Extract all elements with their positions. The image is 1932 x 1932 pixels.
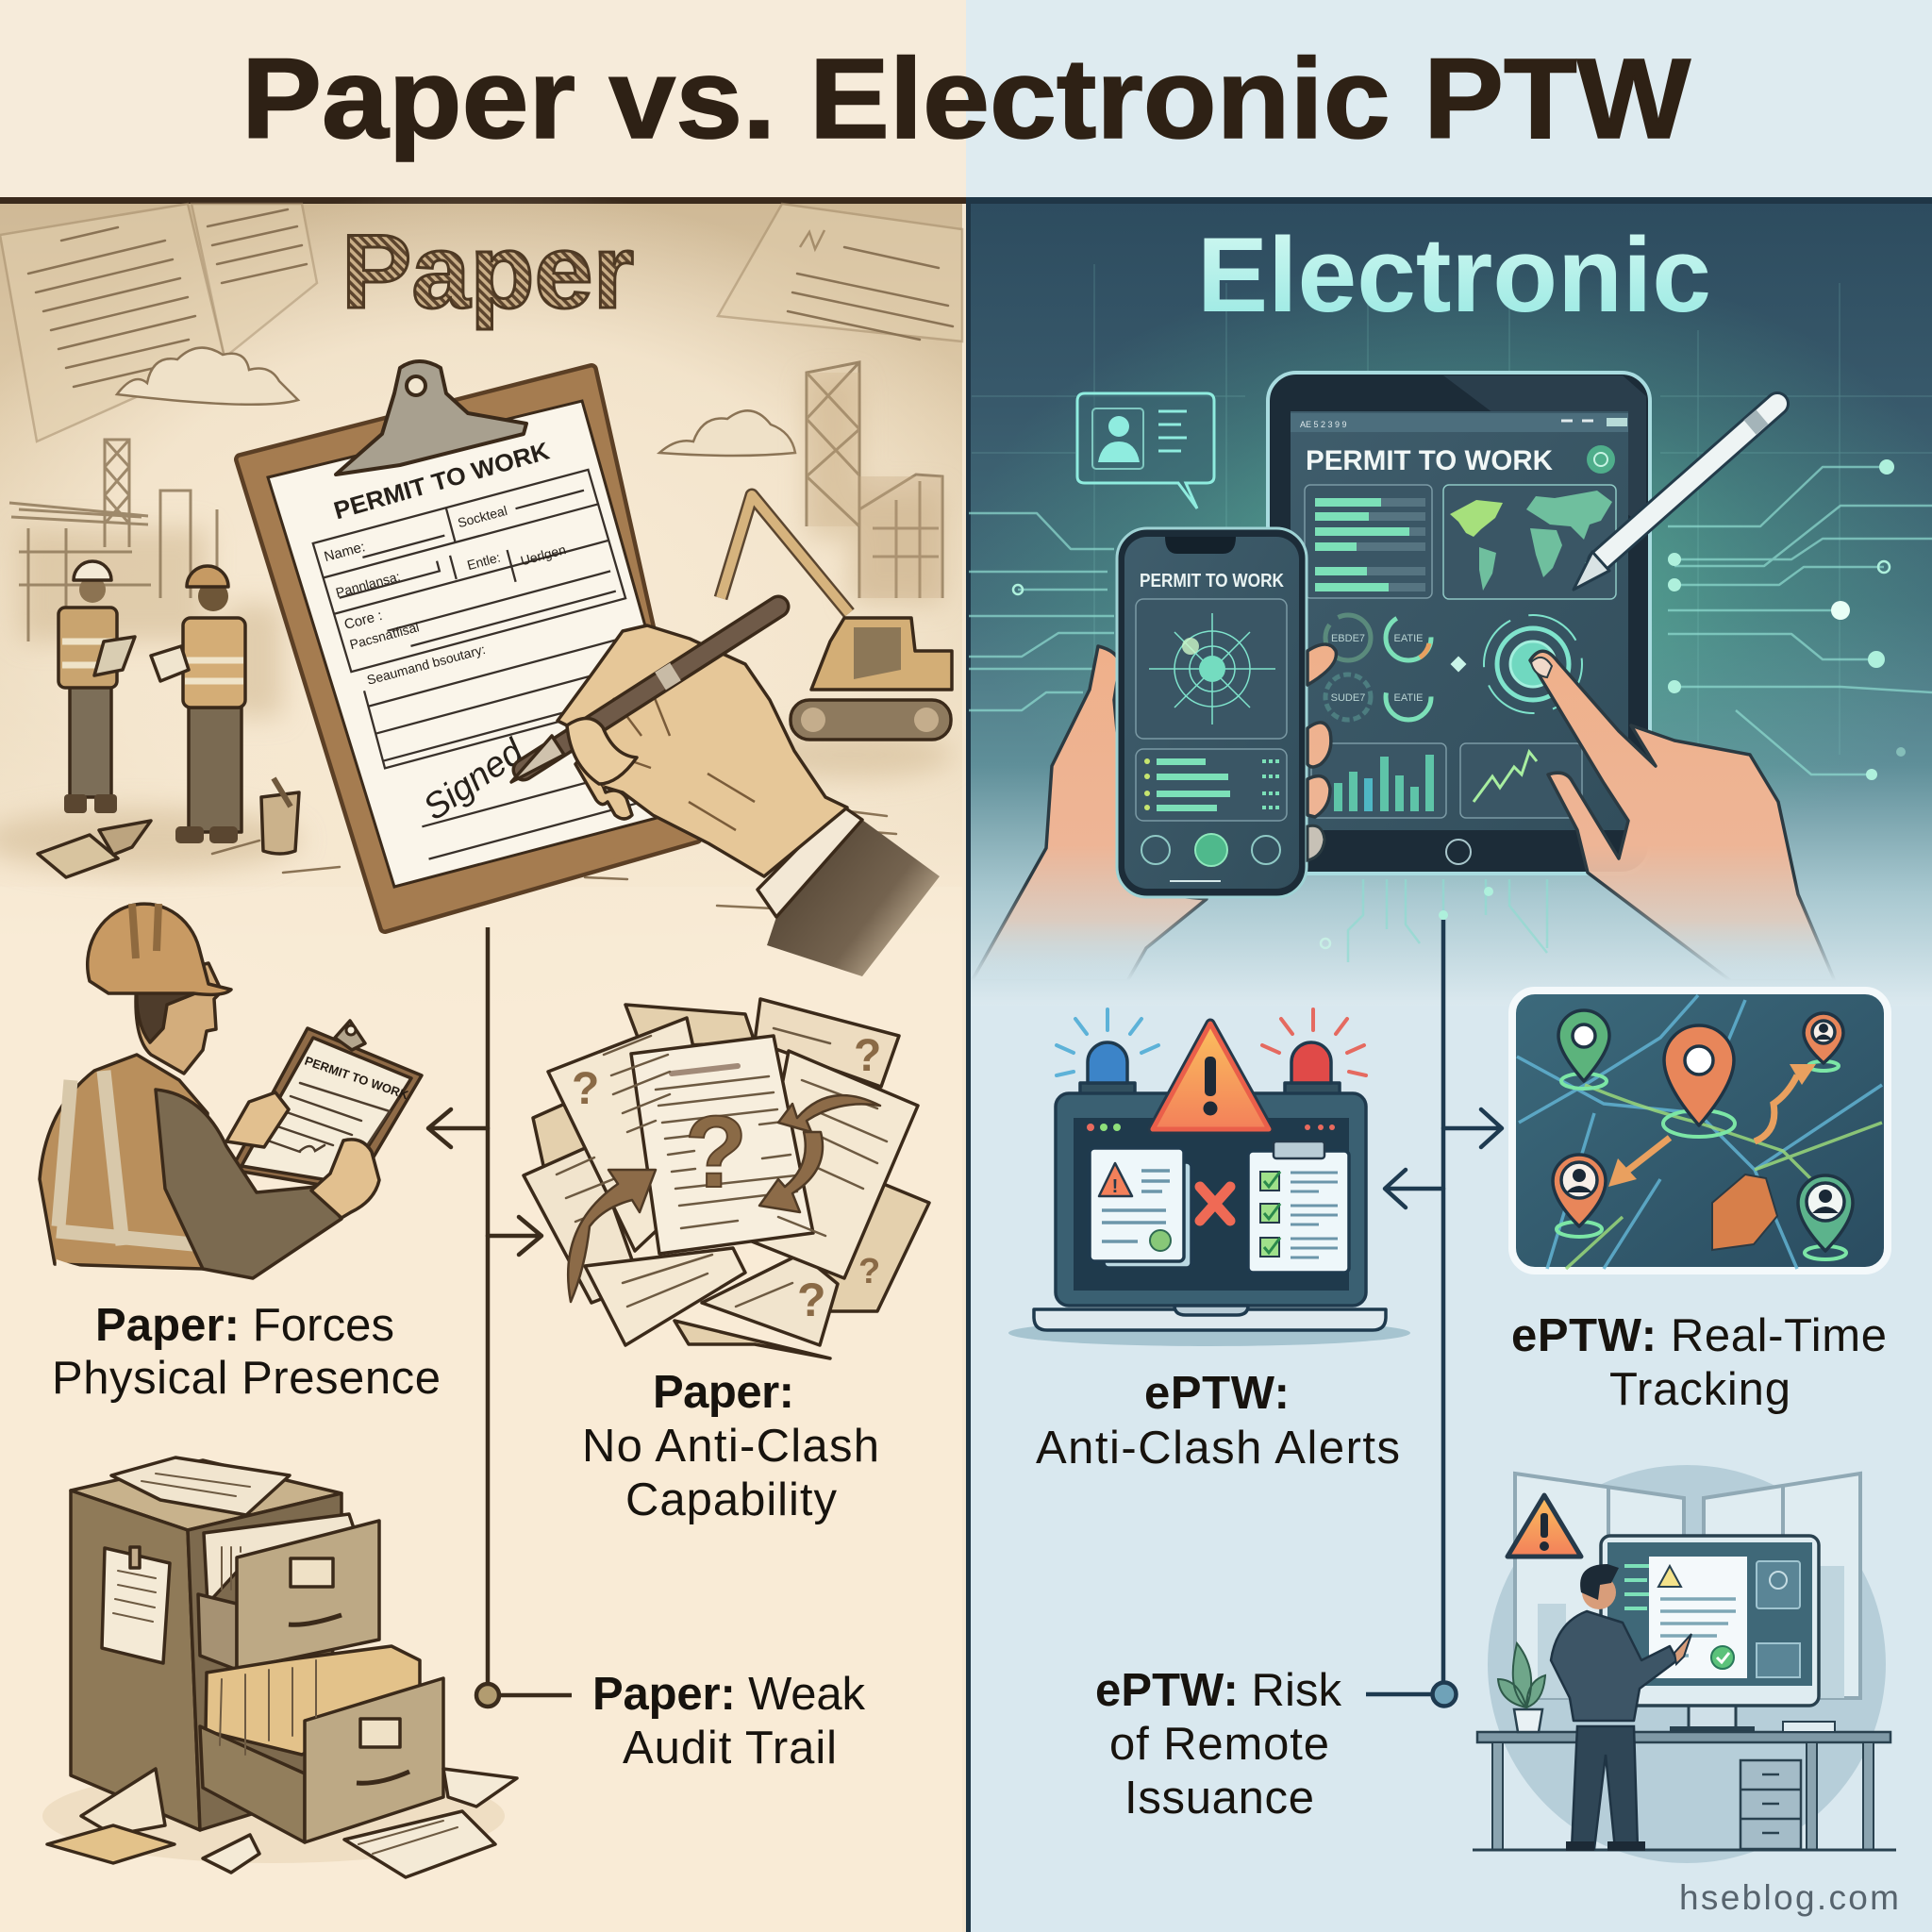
tablet gauges: EATIE bbox=[1394, 692, 1423, 704]
beacons bbox=[1057, 1009, 1366, 1096]
tablet target dial bbox=[1451, 615, 1582, 713]
clip bbox=[336, 361, 526, 475]
form: permit to work sheet: Pacsnatfisal bbox=[348, 619, 421, 652]
form: permit to work sheet: Core : bbox=[342, 608, 384, 633]
label: paper no anti-clash capability bbox=[582, 1367, 879, 1525]
background grid and circuit traces bbox=[969, 264, 1932, 1038]
header band bbox=[0, 0, 1932, 204]
label: paper weak audit trail: Audit Trail bbox=[623, 1723, 837, 1774]
device: stylus bbox=[1574, 404, 1777, 590]
hero: clipboard bbox=[241, 361, 696, 927]
form: permit to work sheet bbox=[302, 425, 684, 867]
arrow: to no anti-clash bbox=[488, 1217, 541, 1255]
phone radar panel bbox=[1136, 599, 1287, 739]
arrow: to anti-clash alerts bbox=[1385, 1170, 1443, 1208]
hero: hand signing with pen bbox=[511, 607, 940, 976]
icon: scattered papers: ? bbox=[858, 1252, 880, 1291]
clash document bbox=[1090, 1148, 1191, 1268]
form: permit to work sheet: Uerlgen bbox=[519, 541, 568, 568]
icon: overflowing filing cabinet bbox=[42, 1457, 517, 1877]
scene: two workers bbox=[58, 561, 245, 843]
scene: bucket and rubble bbox=[38, 778, 896, 908]
arrow: to real-time tracking bbox=[1443, 1109, 1502, 1147]
phone list panel bbox=[1136, 749, 1287, 821]
panel: electronic bbox=[962, 204, 1932, 1932]
arrow: to physical presence bbox=[428, 1109, 488, 1147]
tablet bar chart bbox=[1311, 743, 1446, 818]
label: eptw anti-clash alerts: ePTW: bbox=[1144, 1368, 1290, 1419]
phone-hand fingers bbox=[1307, 644, 1336, 860]
timeline: electronic bbox=[1366, 920, 1502, 1706]
label: paper forces physical presence: Paper: Forces bbox=[95, 1300, 394, 1351]
tablet home button bbox=[1446, 840, 1471, 864]
watermark: hseblog.com bbox=[1679, 1878, 1899, 1917]
label: paper no anti-clash capability: No Anti-Clash bbox=[582, 1421, 879, 1472]
label: paper weak audit trail: Paper: Weak bbox=[592, 1669, 866, 1720]
title: Paper vs. Electronic PTW bbox=[242, 34, 1691, 162]
node: weak audit trail bbox=[500, 1693, 572, 1697]
icon: scattered papers bbox=[524, 999, 929, 1358]
label: paper weak audit trail bbox=[592, 1669, 866, 1774]
label: eptw risk of remote issuance: of Remote bbox=[1109, 1719, 1329, 1770]
arrows: circular mix-up bbox=[568, 1095, 880, 1302]
warning triangle bbox=[1507, 1495, 1581, 1557]
node: risk of remote issuance bbox=[1366, 1692, 1432, 1696]
tablet line chart bbox=[1460, 743, 1582, 818]
label: eptw risk of remote issuance: ePTW: Risk bbox=[1095, 1665, 1341, 1716]
form: permit to work sheet: Pannlansa: bbox=[334, 569, 402, 600]
phone bottom icons bbox=[1141, 834, 1280, 881]
clash document: ! bbox=[1112, 1176, 1118, 1197]
heading: electronic: Electronic bbox=[1197, 216, 1711, 334]
person in suit bbox=[1551, 1564, 1691, 1851]
icon: laptop with clash alerts bbox=[1008, 1009, 1410, 1346]
tablet gauges: EATIE bbox=[1394, 633, 1423, 644]
plant bbox=[1498, 1643, 1545, 1732]
device: tablet bbox=[1268, 373, 1650, 874]
form: permit to work sheet: Name: bbox=[323, 539, 367, 565]
icon: red cross bbox=[1200, 1187, 1230, 1221]
label: paper forces physical presence bbox=[52, 1300, 441, 1404]
form: permit to work sheet: Sockteal bbox=[456, 503, 508, 530]
label: eptw anti-clash alerts: Anti-Clash Alerts bbox=[1036, 1423, 1400, 1474]
icon: remote issuance at workstation bbox=[1473, 1465, 1896, 1863]
orange route bbox=[1755, 1075, 1797, 1141]
icon: scattered papers: ? bbox=[685, 1094, 747, 1208]
icon: worker reading clipboard: PERMIT TO WORK bbox=[303, 1054, 411, 1103]
tablet heading: PERMIT TO WORK bbox=[1306, 445, 1553, 476]
tablet gauges bbox=[1325, 615, 1431, 720]
label: eptw anti-clash alerts bbox=[1036, 1368, 1400, 1474]
tablet gauges: SUDE7 bbox=[1331, 692, 1365, 704]
label: paper forces physical presence: Physical Presence bbox=[52, 1353, 441, 1404]
monitor bbox=[1601, 1536, 1819, 1732]
label: eptw real-time tracking bbox=[1511, 1310, 1887, 1415]
icon: real-time tracking map bbox=[1512, 991, 1888, 1271]
pins bbox=[1553, 1010, 1853, 1251]
label: eptw real-time tracking: Tracking bbox=[1609, 1364, 1790, 1415]
label: paper no anti-clash capability: Paper: bbox=[653, 1367, 794, 1418]
icon: scattered papers: ? bbox=[572, 1064, 599, 1114]
form: permit to work sheet: PERMIT TO WORK bbox=[330, 436, 553, 525]
warning triangle bbox=[1153, 1024, 1269, 1129]
form: permit to work sheet: Entle: bbox=[465, 549, 502, 573]
timeline: paper bbox=[428, 927, 572, 1707]
panel: paper bbox=[0, 189, 1066, 1932]
label: eptw risk of remote issuance bbox=[1095, 1665, 1341, 1824]
background sketch: documents bbox=[0, 204, 962, 441]
tablet list panel bbox=[1305, 485, 1432, 598]
tablet status bar bbox=[1291, 413, 1628, 432]
icon: worker reading clipboard bbox=[40, 904, 422, 1288]
icon: scattered papers: ? bbox=[797, 1274, 826, 1326]
hand holding phone bbox=[972, 646, 1207, 981]
label: eptw real-time tracking: ePTW: Real-Time bbox=[1511, 1310, 1887, 1361]
background sketch: site structures bbox=[9, 362, 942, 641]
label: eptw risk of remote issuance: Issuance bbox=[1124, 1773, 1314, 1824]
tablet status bar: AE 5 2 3 9 9 bbox=[1300, 420, 1347, 429]
background sketch: clouds bbox=[117, 348, 795, 456]
heading: paper: Paper bbox=[341, 213, 634, 330]
icon: scattered papers: ? bbox=[854, 1031, 881, 1081]
background sketch: site haze bbox=[0, 377, 953, 872]
form: permit to work sheet: Seaumand bsoutary: bbox=[365, 641, 487, 688]
phone heading: PERMIT TO WORK bbox=[1140, 571, 1284, 591]
checklist document bbox=[1248, 1141, 1349, 1273]
form: permit to work sheet: Signed bbox=[416, 731, 532, 828]
tablet world map bbox=[1443, 485, 1616, 599]
icon: profile card bbox=[1077, 393, 1214, 508]
desk bbox=[1473, 1722, 1896, 1850]
device: phone bbox=[1117, 528, 1307, 897]
scene: excavator bbox=[721, 495, 952, 740]
hand tapping tablet bbox=[1530, 651, 1835, 981]
tablet gauges: EBDE7 bbox=[1331, 633, 1365, 644]
label: paper no anti-clash capability: Capability bbox=[625, 1474, 838, 1525]
